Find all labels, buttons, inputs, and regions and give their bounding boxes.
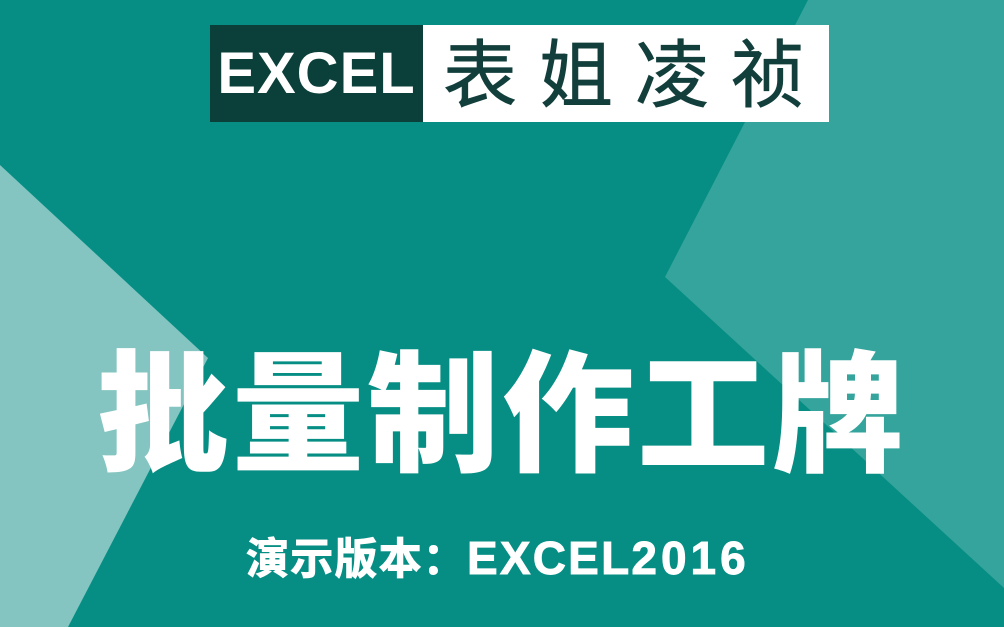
header badge [210,25,829,122]
badge label: EXCEL: EXCEL [217,41,416,106]
badge name: 表姐凌祯 [443,34,827,117]
title: 批量制作工牌 [97,309,907,500]
version note: 演示版本：EXCEL2016 [246,532,750,584]
badge label: EXCEL [210,25,423,122]
